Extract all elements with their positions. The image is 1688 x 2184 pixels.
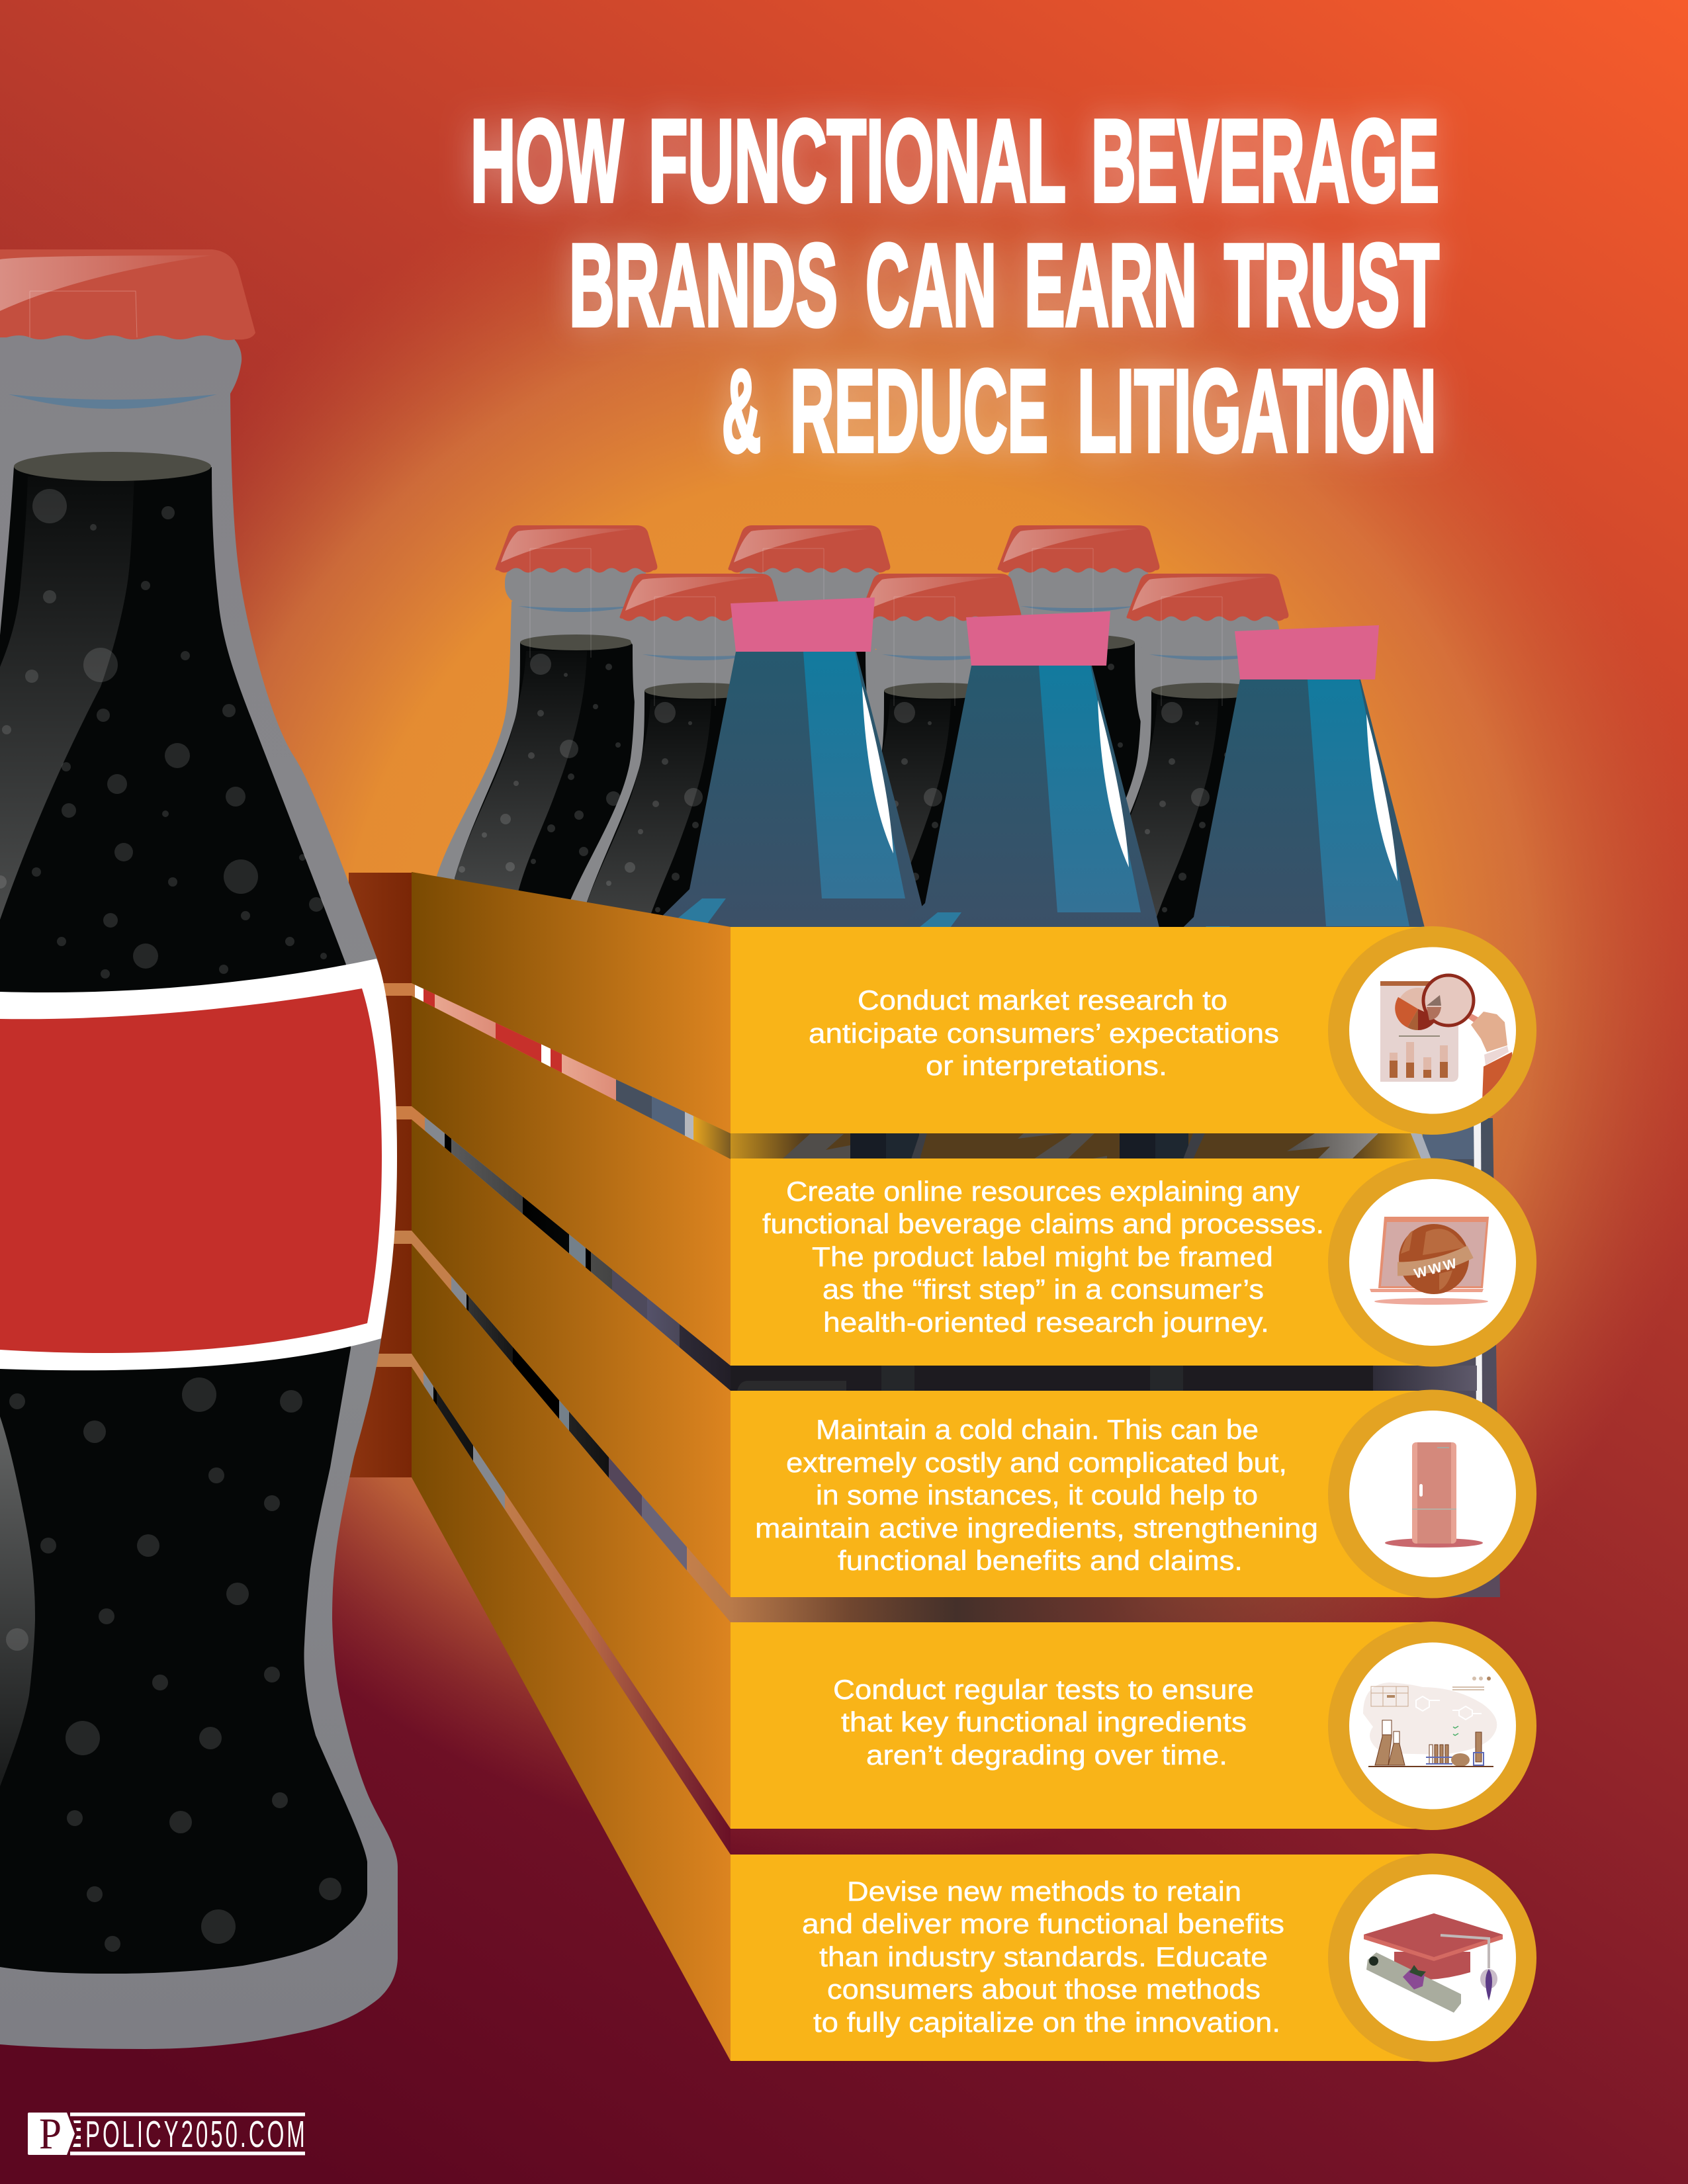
panel text	[755, 1414, 1318, 1576]
liquid surface	[14, 452, 211, 481]
title: TRUST	[1224, 220, 1439, 351]
logo badge	[28, 2113, 75, 2155]
bottle glass	[0, 331, 398, 2049]
panel 5: new methods	[731, 1854, 1536, 2062]
panel text: to fully capitalize on the innovation.	[813, 2007, 1280, 2038]
title: EARN	[1024, 220, 1197, 351]
panel text: health-oriented research journey.	[823, 1307, 1269, 1338]
panel 1: market research	[731, 926, 1536, 1135]
title: CAN	[866, 220, 997, 351]
panel text: than industry standards. Educate	[819, 1941, 1268, 1972]
panel text: Conduct market research to	[858, 984, 1227, 1016]
gap between panels 2 and 3	[731, 1366, 1477, 1391]
panel text: Devise new methods to retain	[847, 1876, 1241, 1907]
icon: laptop with www globe	[1349, 1179, 1516, 1346]
panel text: consumers about those methods	[827, 1974, 1261, 2005]
title: FUNCTIONAL	[648, 95, 1066, 226]
title: &	[722, 345, 761, 476]
title: REDUCE	[790, 345, 1048, 476]
panel text: aren’t degrading over time.	[866, 1739, 1227, 1770]
neck ring	[9, 394, 217, 409]
crate back behind panels	[731, 1118, 1500, 1622]
logo wordmark: POLICY2050.COM	[85, 2113, 305, 2155]
panel text	[802, 1876, 1284, 2038]
gap between panels 1 and 2	[731, 1133, 1431, 1159]
bubbles	[0, 489, 341, 1952]
glass highlight lower	[0, 1417, 35, 1786]
panel text: The product label might be framed	[812, 1241, 1273, 1272]
panel background	[731, 1855, 1432, 2061]
logo letter: P	[39, 2109, 62, 2158]
panel background	[731, 1622, 1432, 1829]
panel text: maintain active ingredients, strengthening	[755, 1512, 1318, 1544]
panel text	[833, 1674, 1254, 1770]
icon: graduation cap and diploma	[1349, 1874, 1516, 2041]
icon: laboratory flasks and test tubes	[1349, 1642, 1516, 1809]
panel text: anticipate consumers’ expectations	[809, 1018, 1279, 1049]
panel text: and deliver more functional benefits	[802, 1908, 1284, 1939]
gaps between crate slats	[412, 983, 731, 1855]
panel text: functional beverage claims and processes.	[762, 1208, 1324, 1239]
panel text: Conduct regular tests to ensure	[833, 1674, 1254, 1705]
panel 4: regular tests	[731, 1622, 1536, 1830]
front row bottles	[561, 574, 1347, 1037]
panel 2: online resources	[731, 1158, 1536, 1367]
icon: laptop with www globe: WWW	[1413, 1255, 1460, 1282]
panel text: Maintain a cold chain. This can be	[816, 1414, 1259, 1445]
large foreground bottle	[0, 249, 398, 2049]
logo: policy2050.com	[28, 2109, 305, 2158]
panel background	[731, 1391, 1432, 1597]
red label	[0, 959, 397, 1370]
panel background	[731, 927, 1432, 1133]
icon badge ring	[1328, 1854, 1536, 2062]
icon badge ring	[1328, 1389, 1536, 1598]
panel text: that key functional ingredients	[841, 1706, 1247, 1737]
icon badge ring	[1328, 926, 1536, 1135]
panel text: as the “first step” in a consumer’s	[822, 1274, 1264, 1305]
panel text	[809, 984, 1279, 1081]
bottle cap	[0, 249, 255, 340]
panel 3: cold chain	[731, 1389, 1536, 1598]
gap shadow between panels 3 and 4	[731, 1597, 1482, 1622]
crate slats	[412, 872, 731, 2061]
panel text: Create online resources explaining any	[786, 1176, 1300, 1207]
icon: report under magnifying glass	[1349, 947, 1516, 1114]
panel background	[731, 1158, 1432, 1366]
title: BRANDS	[569, 220, 838, 351]
title	[470, 95, 1439, 476]
back row bottles	[437, 525, 1218, 988]
logo stripes	[70, 2113, 305, 2156]
icon: refrigerator	[1349, 1411, 1516, 1577]
crate left block	[349, 873, 412, 1477]
panel text: extremely costly and complicated but,	[786, 1447, 1287, 1478]
icon badge ring	[1328, 1622, 1536, 1830]
panel text: functional benefits and claims.	[838, 1545, 1243, 1576]
panel text: or interpretations.	[926, 1050, 1167, 1081]
panel text	[762, 1176, 1324, 1338]
cola liquid	[0, 466, 367, 1974]
glass highlight upper	[0, 476, 134, 920]
panel text: in some instances, it could help to	[816, 1479, 1258, 1510]
title: HOW	[470, 95, 623, 226]
icon badge ring	[1328, 1158, 1536, 1367]
blue bottles with pink necks	[652, 597, 1437, 981]
